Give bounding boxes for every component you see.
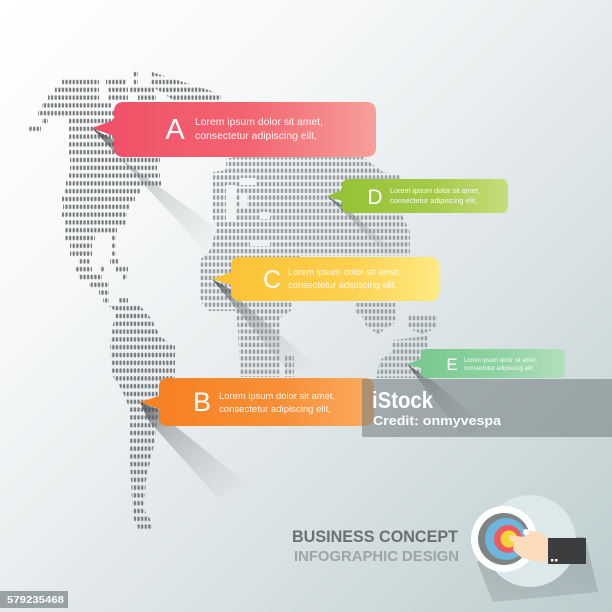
image id strip	[0, 591, 68, 608]
text D: Lorem ipsum dolor sit amet,	[390, 186, 480, 195]
letter A: A	[165, 114, 185, 146]
map: Madagascar	[285, 354, 294, 377]
bubble C: yellow: consectetur adipiscing elit,	[288, 280, 397, 290]
map: North America	[28, 70, 221, 304]
heading: infographic design: INFOGRAPHIC DESIGN	[294, 548, 459, 565]
watermark: iStock: iStock	[372, 387, 433, 413]
text B: Lorem ipsum dolor sit amet,	[219, 391, 335, 402]
long shadow: bubble B	[140, 402, 245, 498]
long shadow: bubble A	[92, 128, 215, 253]
long shadow: bubble C	[212, 279, 314, 374]
bubble D: green: consectetur adipiscing elit,	[390, 196, 477, 205]
image id number: 579235468	[7, 594, 64, 606]
text E: Lorem ipsum dolor sit amet,	[464, 358, 537, 364]
world map: dotted continents	[28, 70, 440, 532]
letter B: B	[193, 387, 211, 417]
map: Australia	[376, 336, 440, 378]
icon shadow	[477, 537, 598, 602]
letter C: C	[263, 266, 281, 294]
map: Southeast Asia islands	[355, 303, 437, 334]
bubble B: orange	[140, 378, 374, 426]
text C: Lorem ipsum dolor sit amet,	[288, 267, 401, 277]
bubble A: red: consectetur adipiscing elit,	[195, 130, 317, 142]
bubble D: green	[327, 179, 508, 213]
letter D: D	[367, 186, 383, 209]
bubble E: mint	[407, 349, 565, 378]
target	[471, 506, 537, 572]
sleeve	[548, 538, 586, 564]
long shadow: bubble E	[407, 364, 492, 436]
bubble E: mint: consectetur adipiscing elit,	[464, 366, 534, 372]
bubble B: orange: consectetur adipiscing elit,	[219, 404, 331, 415]
letter E: E	[446, 355, 458, 374]
watermark: credit: Credit: onmyvespa	[373, 413, 502, 428]
map: Europe, Asia and Africa	[200, 157, 410, 377]
hand	[509, 530, 548, 562]
bubble A: red	[92, 102, 376, 157]
watermark band	[362, 379, 612, 437]
pale backing circle	[484, 495, 576, 587]
heading: business concept: BUSINESS CONCEPT	[292, 528, 458, 546]
map: South America	[107, 304, 175, 532]
text A: Lorem ipsum dolor sit amet,	[195, 116, 323, 128]
icon: target and hand	[471, 495, 598, 602]
bubble C: yellow	[212, 257, 439, 301]
long shadow: bubble D	[327, 196, 402, 258]
